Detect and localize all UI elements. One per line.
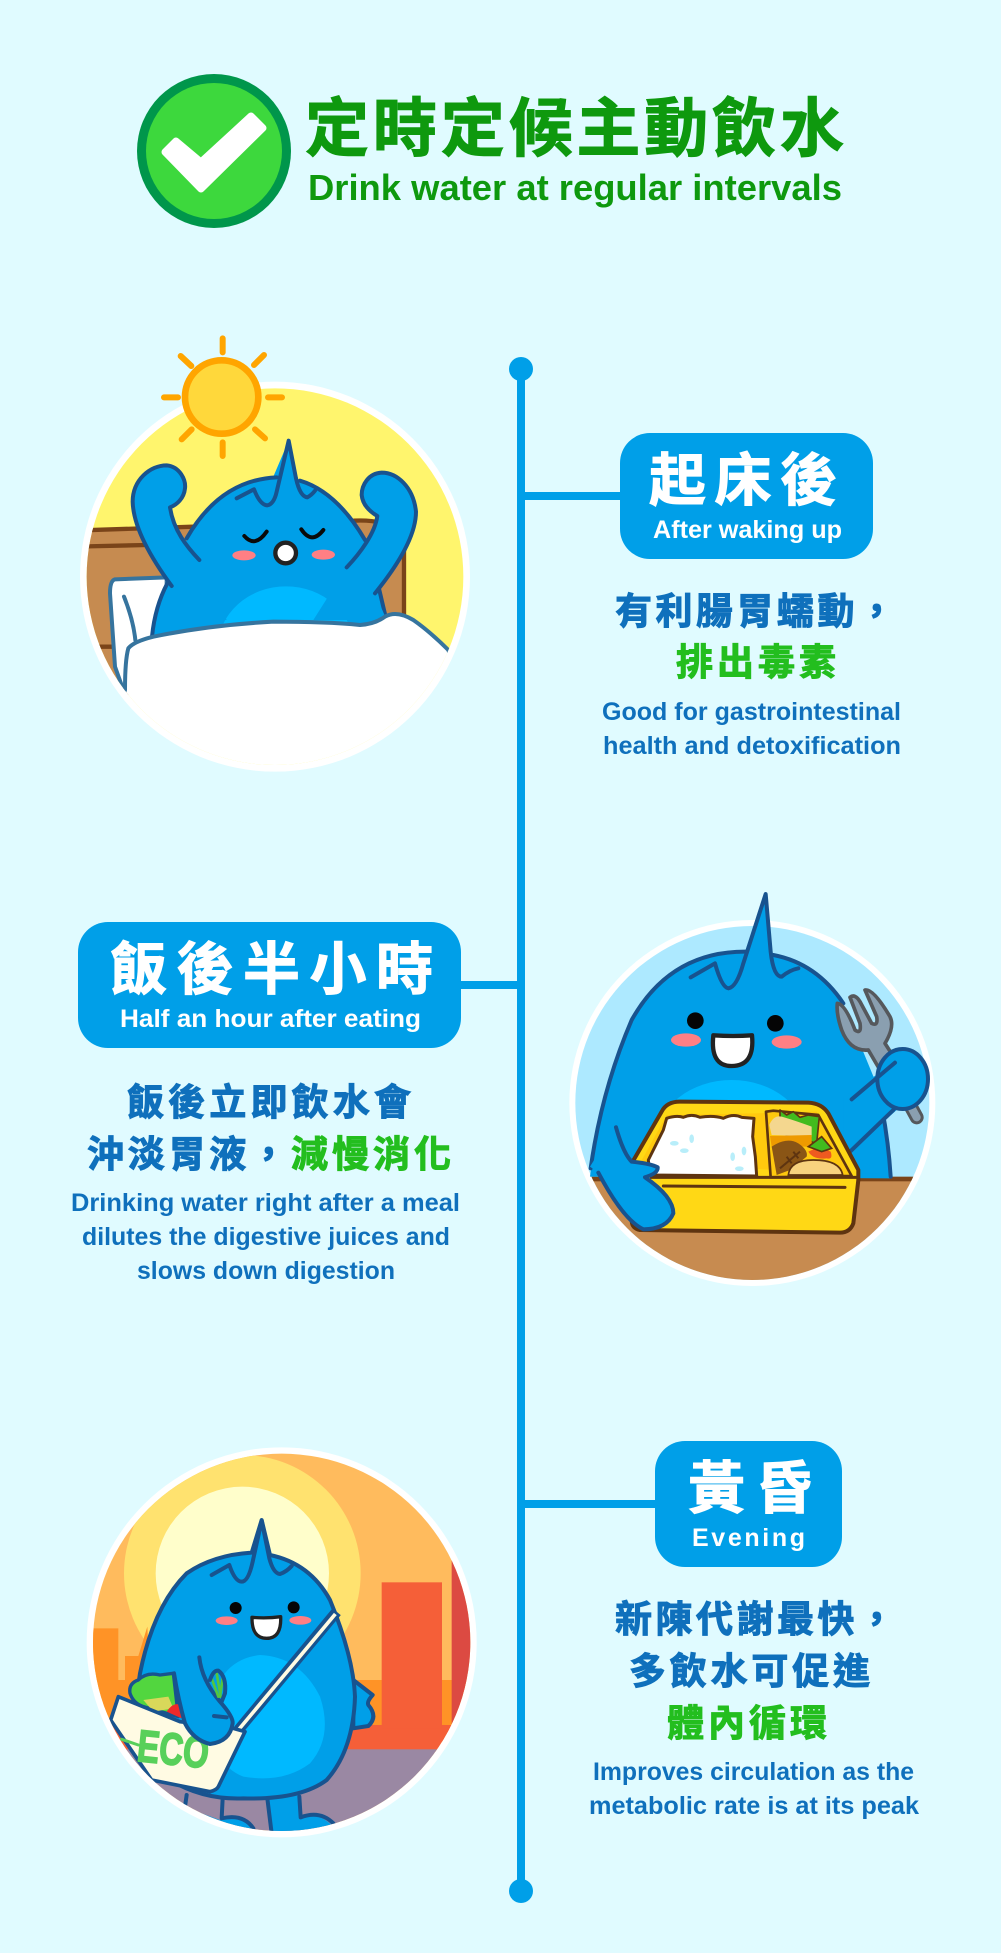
mascot body: [137, 1520, 373, 1798]
mascot body: [130, 438, 418, 636]
text: warning: 減慢消化: [291, 1134, 451, 1175]
blanket: [123, 612, 450, 765]
bag logo: ECO: [135, 1720, 212, 1778]
icon: eco bag with strap: [111, 1612, 337, 1792]
text: benefit: 體內循環: [667, 1703, 827, 1744]
mascot left arm: [590, 1127, 673, 1229]
panel: evening: [589, 1441, 919, 1820]
mascot body: [590, 894, 891, 1200]
mascot arm holding strap: [173, 1657, 233, 1744]
rice: [648, 1115, 757, 1176]
icon: green check badge: [137, 74, 291, 228]
text: benefit: [602, 591, 901, 760]
text: benefit: [589, 1599, 919, 1820]
pillow: [110, 577, 167, 690]
mascot legs: [184, 1793, 336, 1831]
sun glow: [124, 1456, 361, 1638]
label: after waking up: After waking up: [653, 516, 842, 544]
text: warning: dilutes the digestive juices and: [82, 1223, 450, 1251]
illustration: mascot waking up in bed: [80, 335, 470, 772]
text: warning: Drinking water right after a meal: [71, 1189, 460, 1217]
text: warning: slows down digestion: [137, 1257, 395, 1285]
label: evening: Evening: [692, 1524, 805, 1552]
panel: half an hour after eating: [71, 922, 461, 1285]
illustration: mascot eating lunch box: [569, 892, 936, 1286]
icon: fork and hand: [837, 990, 928, 1173]
text: benefit: 新陳代謝最快，: [615, 1599, 895, 1640]
city skyline: [93, 1560, 470, 1831]
bento sides: [766, 1111, 852, 1177]
illustration: mascot with eco bag at sunset: [86, 1448, 477, 1838]
text: benefit: metabolic rate is at its peak: [589, 1792, 919, 1820]
label: half an hour after eating: [78, 922, 461, 1048]
icon: sun: [164, 338, 282, 456]
text: warning: 飯後立即飲水會: [127, 1082, 411, 1123]
headboard: [73, 520, 404, 695]
text: benefit: health and detoxification: [603, 732, 901, 760]
label: evening: 黃昏: [688, 1457, 813, 1521]
text: benefit: Good for gastrointestinal: [602, 698, 901, 726]
icon: vegetables: [130, 1673, 182, 1718]
title: Drink water at regular intervals: [308, 167, 842, 208]
label: evening: [655, 1441, 842, 1567]
timeline: [460, 357, 656, 1903]
label: half an hour after eating: 飯後半小時: [110, 938, 433, 1002]
icon: lunch box: [632, 1102, 858, 1233]
title: [305, 93, 844, 208]
text: warning: [71, 1082, 460, 1285]
label: after waking up: 起床後: [649, 449, 837, 513]
text: warning: 沖淡胃液，: [87, 1134, 287, 1175]
label: after waking up: [620, 433, 873, 559]
text: benefit: Improves circulation as the: [593, 1758, 914, 1786]
text: benefit: 多飲水可促進: [629, 1651, 870, 1692]
title: 定時定候主動飲水: [305, 93, 844, 165]
label: half an hour after eating: Half an hour after eating: [120, 1005, 421, 1033]
text: benefit: 有利腸胃蠕動，: [615, 591, 895, 632]
panel: after waking up: [602, 433, 901, 760]
text: benefit: 排出毒素: [676, 642, 836, 683]
